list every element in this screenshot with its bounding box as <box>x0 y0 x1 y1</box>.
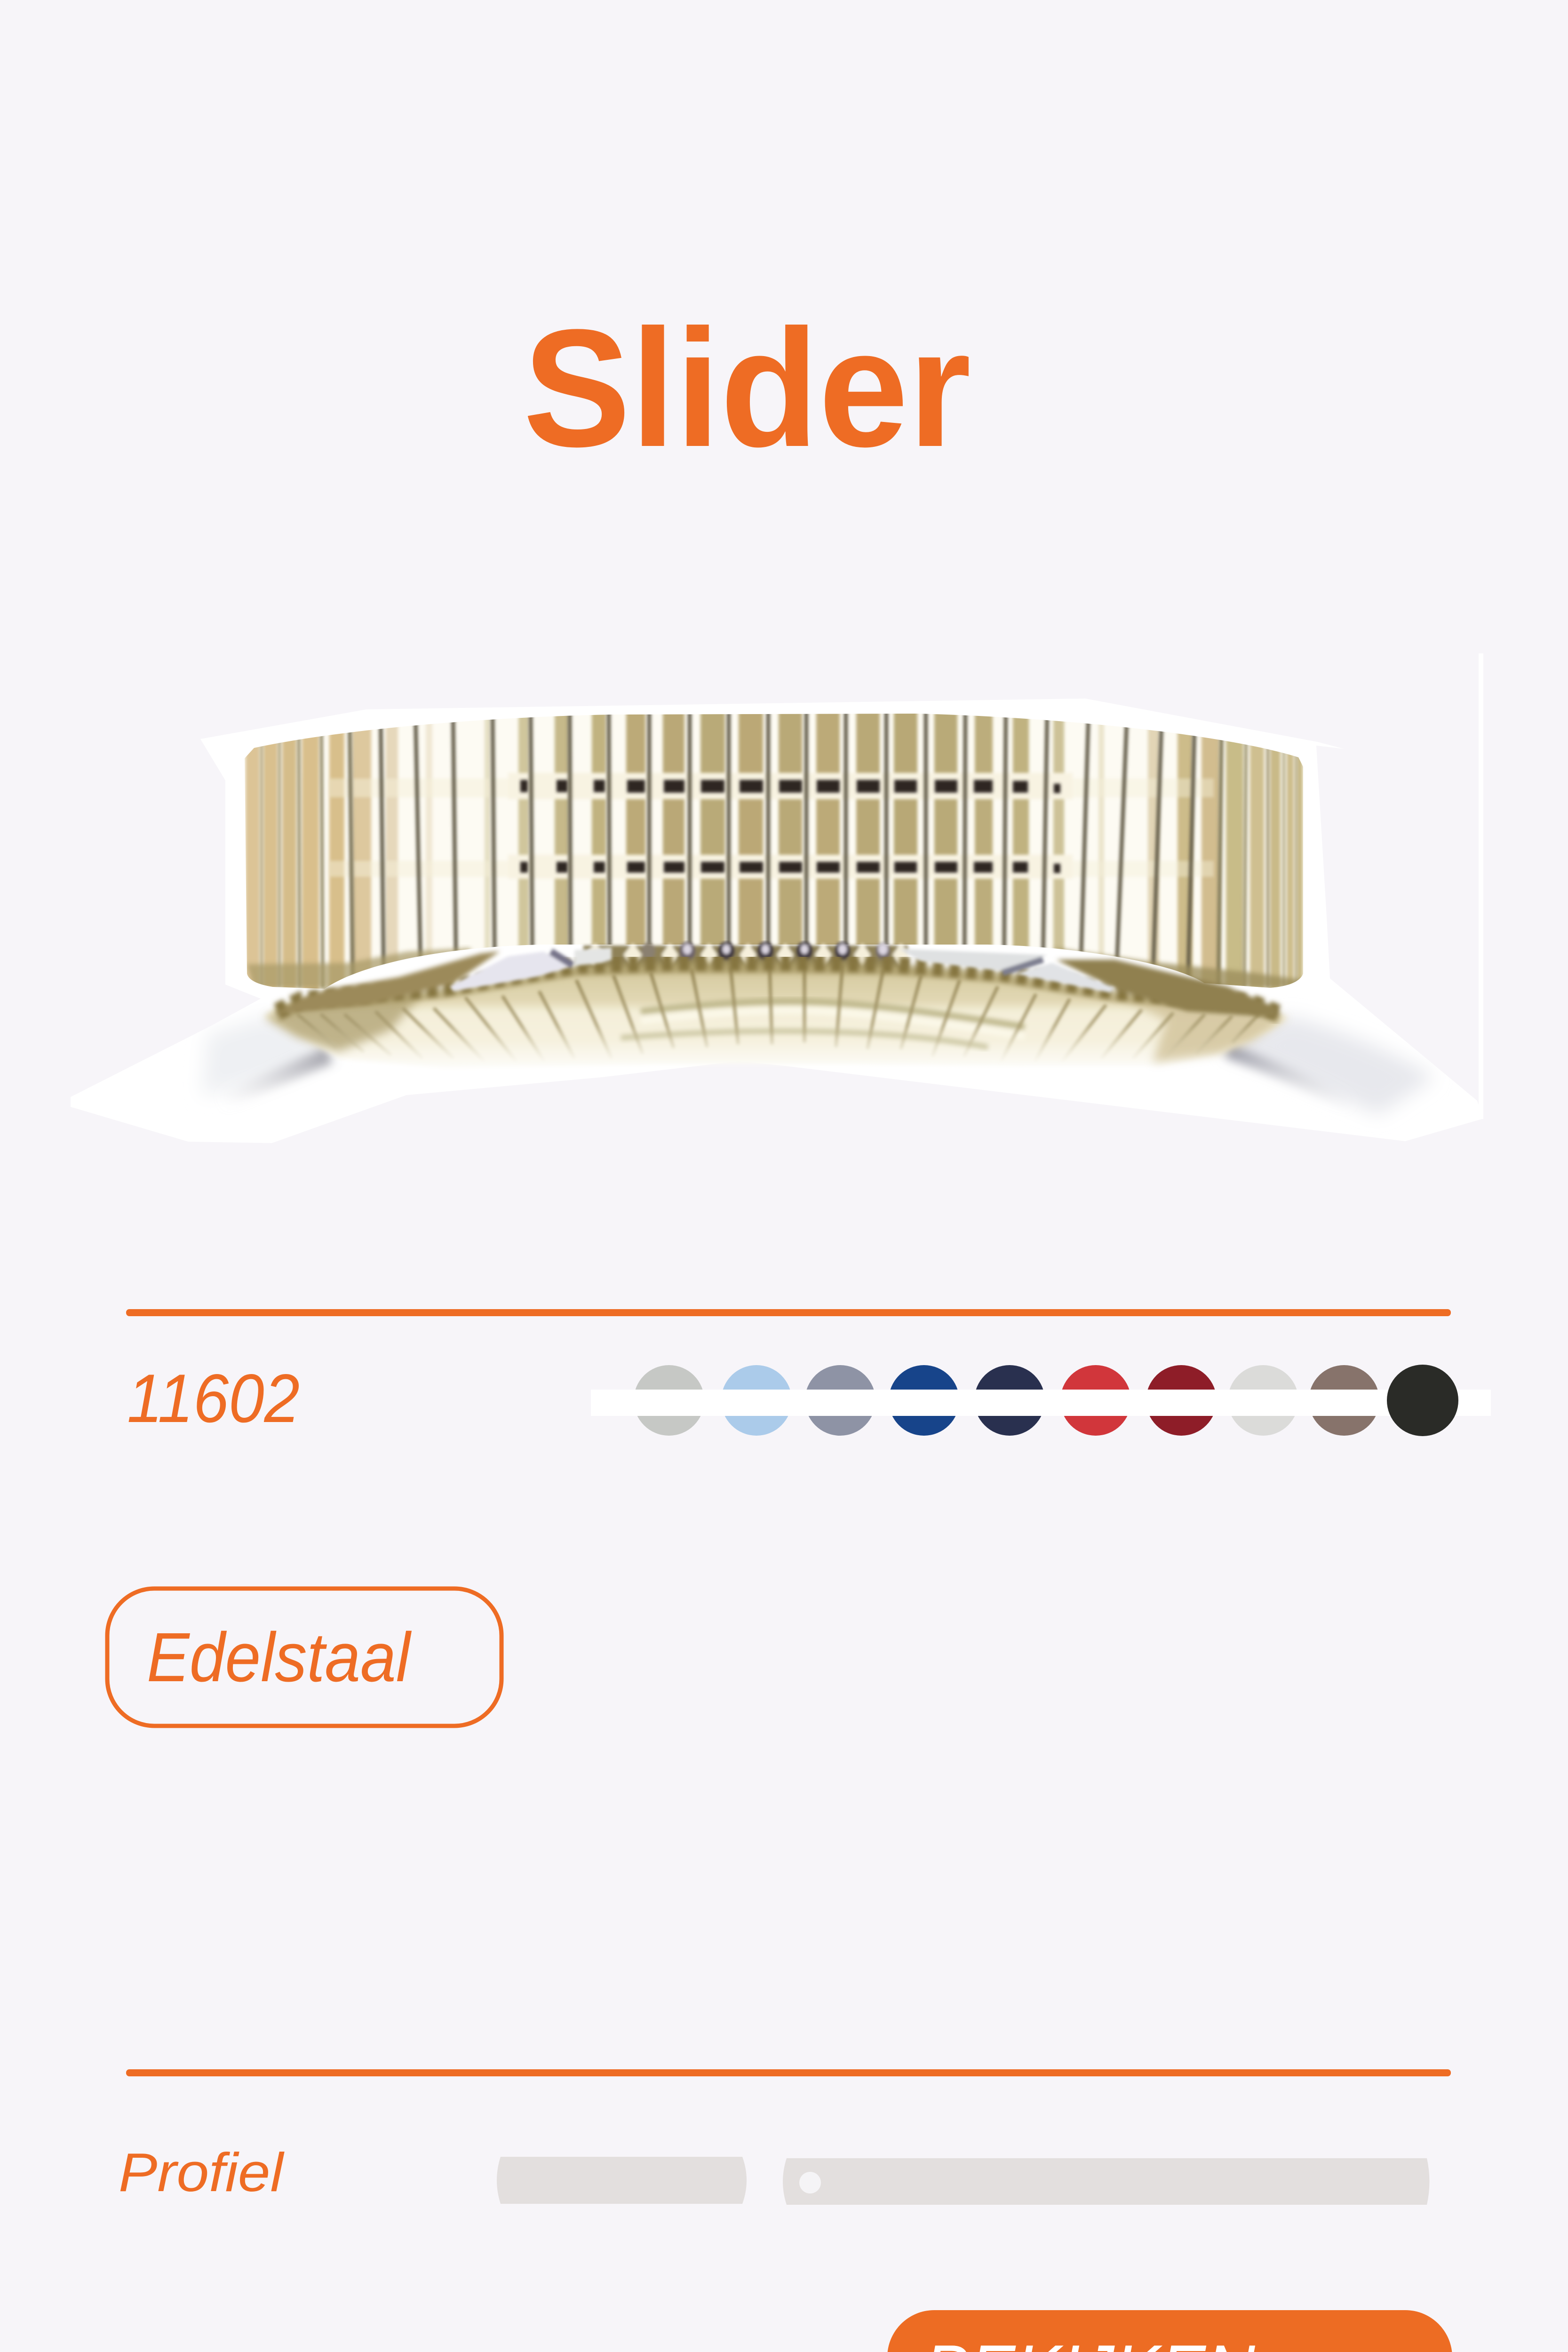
button: BEKIJKEN <box>887 2310 1452 2352</box>
white cut-out behind band <box>71 699 1483 1143</box>
cream cross rows <box>329 773 1214 879</box>
fan arc stripes <box>621 1001 1025 1047</box>
upper band links <box>242 710 1305 993</box>
teeth strip between band and fan <box>583 942 909 970</box>
colour swatches <box>591 1365 1491 1436</box>
profile block small <box>497 2157 747 2204</box>
white vertical sliver <box>1479 653 1483 1119</box>
dark vertical link seams <box>262 710 1296 988</box>
tan link faces <box>246 710 1303 993</box>
inner strap visible, right <box>899 949 1115 993</box>
dark link openings <box>520 780 1060 873</box>
inner strap visible, left <box>450 947 612 991</box>
olive lower edge of band <box>247 948 470 988</box>
label: Profiel: Profiel <box>119 2142 285 2203</box>
olive underside, right <box>1056 960 1277 1017</box>
divider bottom <box>126 2069 1451 2076</box>
product image: expansion watch band <box>71 653 1483 1143</box>
lower band fan <box>264 962 1288 1068</box>
fan link lines <box>297 964 1259 1066</box>
article number: 11602 <box>127 1360 300 1437</box>
strap shadows <box>202 1016 1435 1115</box>
fan shaded ends <box>264 993 423 1051</box>
title: Slider <box>523 295 971 482</box>
material pill: Edelstaal <box>107 1589 501 1726</box>
profile block large <box>783 2158 1429 2205</box>
divider top <box>126 1309 1451 1316</box>
fan toothed top edge <box>278 962 1280 1018</box>
olive underside, left <box>274 951 500 1014</box>
material pill: Edelstaal: Edelstaal <box>147 1619 412 1696</box>
